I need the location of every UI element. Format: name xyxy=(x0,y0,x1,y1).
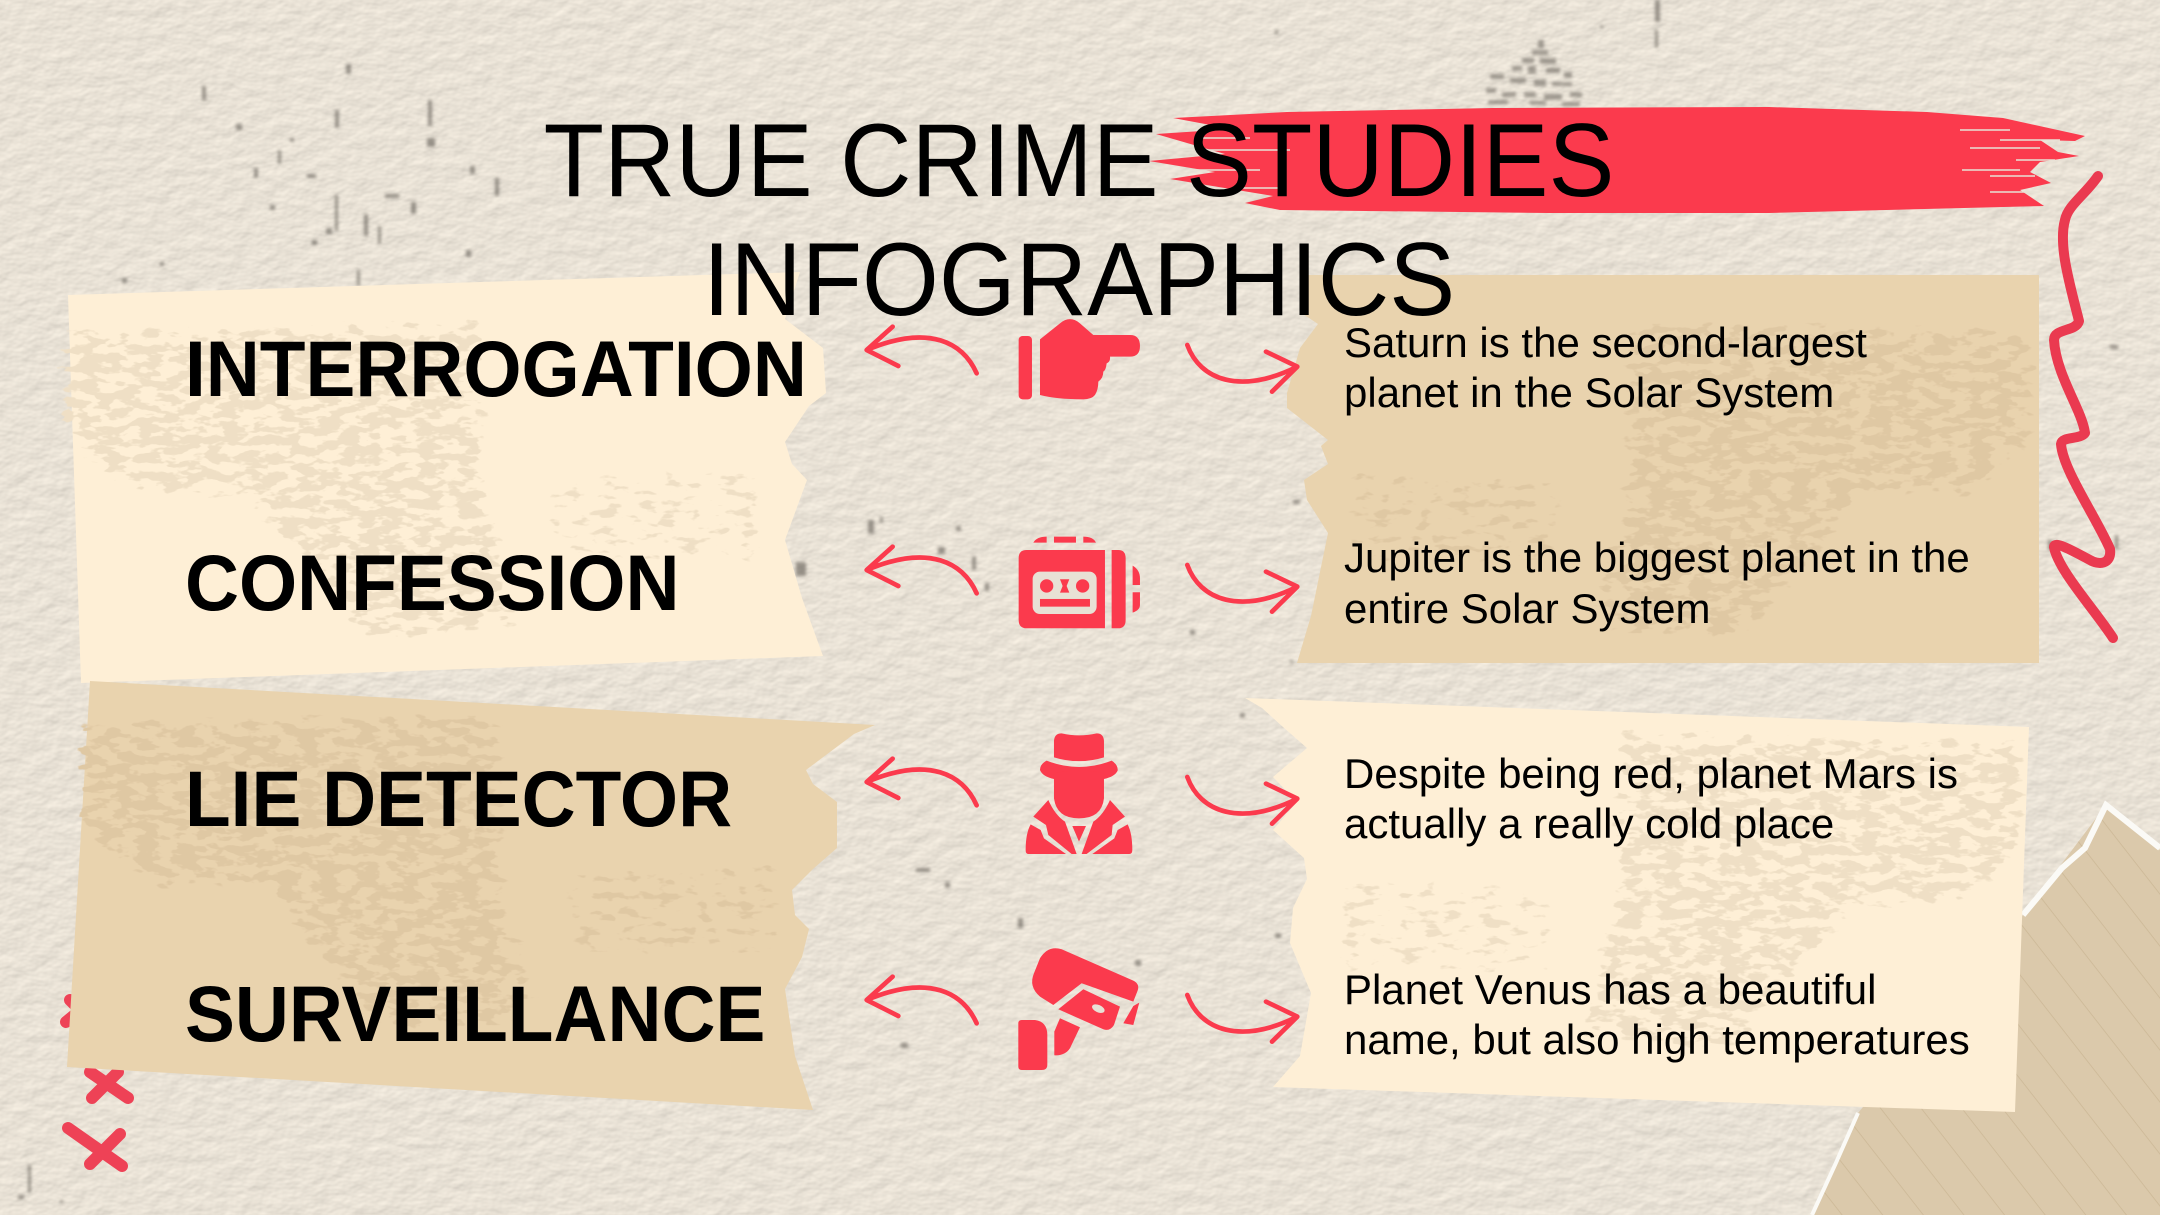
panel stain xyxy=(1330,725,2029,1060)
arrow: row 2 right xyxy=(1187,565,1297,612)
icon: security camera xyxy=(1018,948,1139,1070)
title: TRUE CRIME STUDIES xyxy=(544,103,1614,219)
panel: left top, cream torn paper xyxy=(55,272,826,683)
icon: detective xyxy=(1026,733,1132,854)
heading: surveillance: SURVEILLANCE xyxy=(185,971,765,1058)
icon: pointing hand xyxy=(1019,319,1140,399)
text block: Saturn xyxy=(1344,319,1867,416)
text block: Jupiter: entire Solar System xyxy=(1344,585,1710,632)
icon: tape recorder xyxy=(1019,537,1140,628)
text block: Saturn: planet in the Solar System xyxy=(1344,369,1834,416)
text block: Jupiter: Jupiter is the biggest planet in the xyxy=(1344,534,1970,581)
text block: Mars: actually a really cold place xyxy=(1344,800,1834,847)
red squiggle, right side xyxy=(2054,176,2113,638)
heading: interrogation: INTERROGATION xyxy=(185,326,807,413)
panel: left bottom, tan torn paper xyxy=(67,681,875,1110)
text block: Venus: name, but also high temperatures xyxy=(1344,1016,1970,1063)
arrow: row 3 right xyxy=(1187,777,1297,824)
heading: lie detector: LIE DETECTOR xyxy=(185,756,732,843)
panel: right bottom, cream torn paper xyxy=(1245,698,2029,1112)
arrow: row 4 left xyxy=(867,977,977,1023)
text block: Venus xyxy=(1344,966,1970,1063)
title: INFOGRAPHICS xyxy=(703,222,1455,338)
panel stain xyxy=(73,707,788,1042)
arrow: row 1 right xyxy=(1187,345,1297,392)
panel: right top, tan torn paper xyxy=(1287,275,2039,663)
red brush stroke behind title xyxy=(1149,107,2085,213)
title xyxy=(544,103,1614,338)
background: dark grunge patch, top centre-right xyxy=(1486,40,1582,106)
torn notebook paper, bottom right xyxy=(1812,805,2160,1215)
text block: Mars: Despite being red, planet Mars is xyxy=(1344,750,1958,797)
text block: Mars xyxy=(1344,750,1958,847)
red X marks, bottom left xyxy=(66,1000,128,1166)
arrow: row 3 left xyxy=(867,759,977,805)
arrow: row 1 left xyxy=(867,327,977,373)
text block: Venus: Planet Venus has a beautiful xyxy=(1344,966,1876,1013)
text block: Jupiter xyxy=(1344,534,1970,632)
brush streaks xyxy=(1180,130,2060,192)
heading: confession: CONFESSION xyxy=(185,540,680,627)
arrow: row 2 left xyxy=(867,547,977,593)
text block: Saturn: Saturn is the second-largest xyxy=(1344,319,1867,366)
panel stain xyxy=(1340,315,2039,650)
panel stain xyxy=(55,315,770,650)
arrow: row 4 right xyxy=(1187,995,1297,1042)
